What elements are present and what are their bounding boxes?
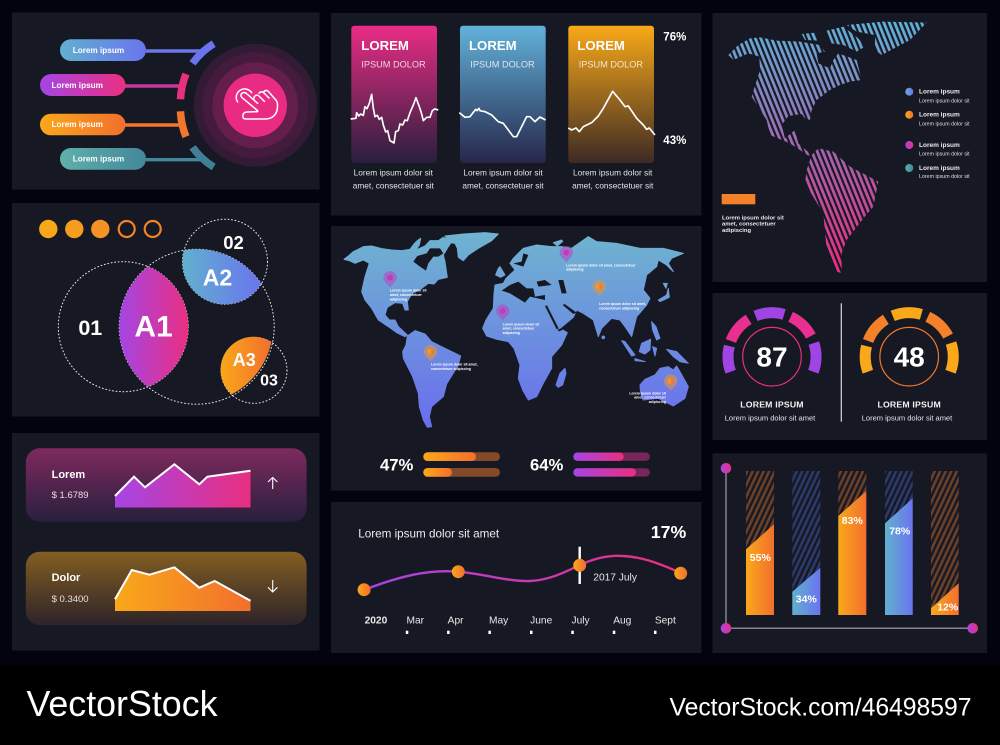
lens A2 — [182, 249, 261, 304]
card: Lorem: Lorem — [52, 469, 85, 481]
card 1: LOREM — [361, 38, 409, 53]
pin: North America — [383, 271, 427, 301]
labels 01 02 03 — [78, 232, 278, 390]
pin: Africa: Lorem ipsum dolor sit — [503, 322, 540, 326]
gauge 87 — [725, 313, 816, 423]
gauge 87: Lorem ipsum dolor sit amet — [725, 414, 816, 423]
icon: pointing hand — [236, 89, 278, 119]
bar 83% — [838, 471, 866, 615]
timeline axis labels: Apr — [448, 615, 464, 626]
menu item 3 — [40, 111, 186, 137]
menu item 1 — [60, 39, 214, 63]
lens A3: A3 — [233, 350, 256, 370]
panel: touch menu — [12, 12, 320, 190]
footer band — [0, 665, 1000, 745]
dotted circles — [58, 219, 287, 404]
timeline axis labels: June — [530, 615, 553, 626]
labels 01 02 03: 03 — [260, 373, 278, 390]
progress: 47%: 47% — [380, 456, 414, 475]
bar 34% — [792, 471, 820, 615]
pin: North America: adipiscing — [390, 297, 407, 301]
swatch note: amet, consectetuer — [722, 222, 776, 228]
bar 78%: 78% — [889, 525, 911, 537]
lens A1 — [119, 266, 188, 387]
legend: Lorem ipsum dolor sit — [919, 151, 970, 157]
lens A3 — [221, 337, 271, 394]
pin: Asia — [593, 280, 646, 310]
concentric target circles — [194, 44, 317, 167]
rating dots — [39, 220, 161, 238]
pin: South America: Lorem ipsum dolor sit amet, — [431, 363, 478, 367]
pin: South America: consectetuer adipiscing — [431, 367, 471, 371]
bar 78% — [885, 471, 913, 615]
card 3: IPSUM DOLOR — [579, 59, 643, 69]
card 2: Lorem ipsum dolor sit — [463, 167, 543, 177]
card 3: LOREM — [577, 38, 625, 53]
panel: Americas map — [712, 13, 987, 282]
pin: Asia: Lorem ipsum dolor sit amet, — [599, 302, 646, 306]
progress: 64%: 64% — [530, 456, 564, 475]
card 3: amet, consectetuer sit — [572, 181, 654, 191]
timeline ticks — [406, 631, 656, 634]
pin: Africa — [496, 304, 540, 335]
card 2: LOREM — [469, 38, 517, 53]
chart axes — [721, 463, 978, 634]
card: Lorem: $ 1.6789 — [52, 490, 89, 501]
card 2: IPSUM DOLOR — [470, 59, 535, 69]
pin: Russia: adipiscing — [566, 268, 584, 272]
panel: venn diagram — [12, 203, 320, 416]
pin: Australia: Lorem ipsum dolor sit — [629, 391, 667, 395]
orange swatch — [722, 194, 755, 204]
timeline axis labels: 2020 — [365, 615, 388, 626]
legend: Lorem ipsum — [919, 88, 960, 96]
legend: Lorem ipsum dolor sit — [919, 98, 970, 104]
menu item 4 — [60, 147, 214, 170]
card 3 — [568, 26, 655, 191]
pin: Africa: adipiscing — [503, 331, 520, 335]
card 1: amet, consectetuer sit — [353, 181, 435, 191]
panel: timeline — [331, 502, 702, 653]
pin: Australia — [629, 374, 677, 404]
bar 55%: 55% — [750, 552, 771, 564]
gauge 48: LOREM IPSUM — [877, 399, 941, 409]
legend: Lorem ipsum dolor sit — [919, 174, 970, 180]
pin: Russia — [560, 246, 636, 272]
timeline value: 17% — [651, 522, 686, 542]
timeline curve — [358, 547, 687, 596]
card 1: Lorem ipsum dolor sit — [354, 167, 434, 177]
card: Dolor: $ 0.3400 — [52, 594, 89, 605]
gauge 87: 87 — [756, 341, 788, 372]
timeline title: Lorem ipsum dolor sit amet — [358, 527, 500, 540]
bar 34%: 34% — [796, 593, 817, 605]
lens A2: A2 — [203, 265, 232, 291]
bar 12% — [931, 471, 959, 615]
watermark url: VectorStock.com/46498597 — [670, 694, 971, 722]
progress: 64% — [530, 452, 650, 477]
watermark logo: VectorStock — [26, 684, 218, 724]
timeline curve: 2017 July — [593, 572, 638, 583]
pin: North America: amet, consectetuer — [390, 293, 422, 297]
gauge 48: Lorem ipsum dolor sit amet — [862, 414, 953, 423]
scale values: 76% — [663, 31, 686, 43]
card 2 — [459, 26, 546, 191]
gauge 87: LOREM IPSUM — [740, 399, 804, 409]
pin: South America — [424, 345, 478, 371]
timeline axis labels: July — [572, 615, 591, 626]
gauge 48: 48 — [894, 341, 925, 372]
pin: Asia: consectetuer adipiscing — [599, 306, 639, 310]
timeline axis labels: Mar — [407, 615, 425, 626]
labels 01 02 03: 02 — [223, 232, 244, 253]
card: Lorem — [26, 448, 307, 522]
pin: Russia: Lorem ipsum dolor sit amet, consectetuer — [566, 263, 636, 267]
timeline axis labels: Sept — [655, 615, 676, 626]
card 1: IPSUM DOLOR — [361, 59, 426, 69]
menu item 1: Lorem ipsum — [73, 46, 124, 55]
card 1 — [351, 26, 438, 191]
card: Dolor: Dolor — [52, 572, 81, 584]
panel: three line charts — [331, 13, 702, 216]
menu item 3: Lorem ipsum — [52, 120, 103, 129]
timeline axis labels: Aug — [613, 615, 632, 626]
menu item 2: Lorem ipsum — [52, 81, 103, 90]
bar 83%: 83% — [842, 515, 863, 527]
legend: Lorem ipsum — [919, 165, 960, 172]
legend: Lorem ipsum dolor sit — [919, 121, 970, 127]
card: Dolor — [26, 552, 307, 625]
pin: Australia: amet, consectetuer — [634, 396, 667, 400]
progress: 47% — [380, 452, 500, 477]
menu item 4: Lorem ipsum — [73, 154, 124, 164]
gauge 48 — [862, 313, 953, 423]
pin: North America: Lorem ipsum dolor sit — [390, 289, 427, 293]
swatch note: adipiscing — [722, 228, 752, 234]
legend: Lorem ipsum — [919, 112, 960, 118]
panel: world map — [331, 226, 702, 490]
bar 12%: 12% — [937, 601, 959, 613]
striped Americas map — [728, 22, 927, 273]
bar 55% — [746, 471, 774, 615]
legend: Lorem ipsum — [919, 142, 960, 149]
scale values: 43% — [663, 135, 686, 147]
scale values — [663, 31, 686, 147]
lens A1: A1 — [134, 310, 173, 344]
pin: Africa: amet, consectetuer — [503, 327, 535, 331]
panel: bar chart — [712, 453, 987, 653]
card 3: Lorem ipsum dolor sit — [573, 167, 653, 177]
swatch note: Lorem ipsum dolor sit — [722, 215, 784, 221]
menu item 2 — [40, 74, 186, 99]
card 2: amet, consectetuer sit — [462, 181, 544, 191]
map pins and notes — [383, 246, 677, 404]
divider — [840, 303, 842, 422]
legend — [905, 88, 970, 180]
timeline axis labels — [365, 615, 676, 626]
panel: value cards — [12, 433, 320, 650]
panel: gauges — [712, 293, 987, 440]
world map — [344, 233, 688, 427]
timeline axis labels: May — [489, 615, 509, 626]
labels 01 02 03: 01 — [78, 316, 102, 340]
pin: Australia: adipiscing — [649, 400, 666, 404]
